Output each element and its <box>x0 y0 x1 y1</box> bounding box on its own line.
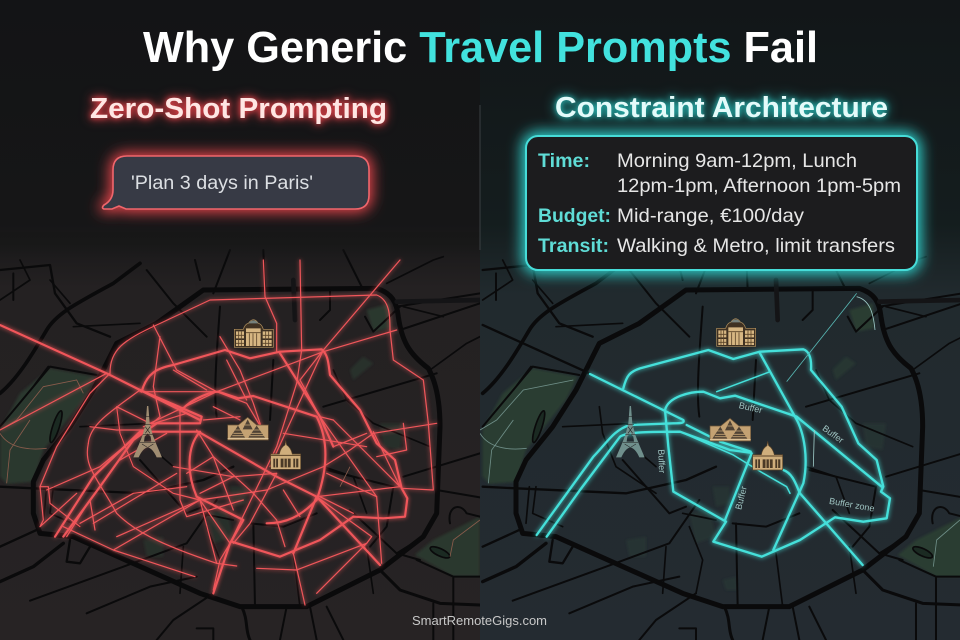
icon: palace landmark <box>234 320 273 347</box>
fade at top of left map <box>0 232 480 258</box>
thin orange trails <box>0 380 480 557</box>
background: right panel <box>480 0 960 640</box>
panel: constraint list box <box>526 136 917 270</box>
panel: right map of Paris with structured cyan routes <box>480 250 960 640</box>
prompt text: 'Plan 3 days in Paris' <box>131 173 313 194</box>
title: Why Generic Travel Prompts Fail <box>143 23 818 72</box>
constraint: time: 12pm-1pm, Afternoon 1pm-5pm <box>617 175 901 197</box>
constraint: budget: Budget: <box>538 206 611 227</box>
constraint: time: Morning 9am-12pm, Lunch <box>617 150 857 172</box>
route labels: buffer zones: Buffer zone <box>828 496 875 514</box>
route labels: buffer zones: Buffer <box>821 423 846 445</box>
watermark: SmartRemoteGigs.com <box>412 613 547 628</box>
icon: Eiffel Tower <box>616 406 645 457</box>
icon: Louvre pyramid landmark <box>228 417 268 440</box>
constraint: time <box>538 150 901 197</box>
thin grey trails <box>480 380 960 567</box>
center divider <box>479 105 481 250</box>
heading: Constraint Architecture: Constraint Architecture <box>555 92 888 124</box>
panel: left map of Paris with chaotic red routes <box>0 232 480 640</box>
icon: Eiffel Tower <box>133 406 162 457</box>
background: left panel <box>0 0 480 640</box>
constraint: budget: Mid-range, €100/day <box>617 205 804 227</box>
route labels: buffer zones <box>656 400 875 514</box>
icon: Pantheon landmark <box>753 441 783 470</box>
parks <box>0 303 480 577</box>
icon: Louvre pyramid landmark <box>710 418 751 441</box>
constraint: budget <box>538 205 804 227</box>
constraint: transit: Transit: <box>538 236 609 257</box>
heading: Zero-Shot Prompting: Zero-Shot Prompting <box>90 93 387 125</box>
route labels: buffer zones: Buffer <box>738 400 763 415</box>
icon: palace landmark <box>717 319 756 346</box>
constraint: transit: Walking & Metro, limit transfers <box>617 235 895 257</box>
parks <box>483 303 960 590</box>
route labels: buffer zones: Buffer <box>656 449 667 473</box>
route labels: buffer zones: Buffer <box>733 485 749 511</box>
constraint: time: Time: <box>538 151 590 172</box>
cyan routes <box>537 349 890 565</box>
icon: Pantheon landmark <box>271 441 301 469</box>
red routes <box>0 260 437 605</box>
callout: generic prompt speech bubble <box>102 156 369 209</box>
